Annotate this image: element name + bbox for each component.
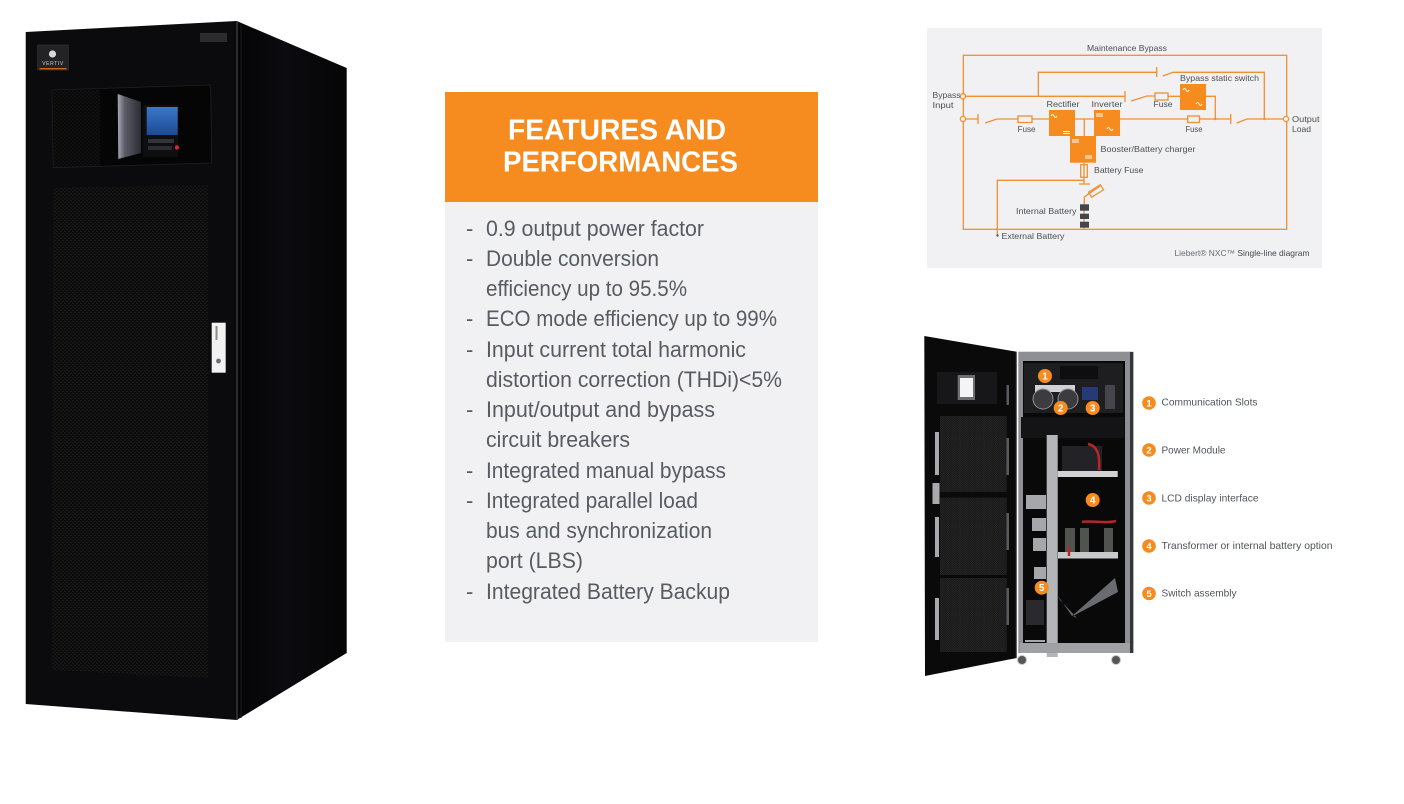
feature list: ECO mode efficiency up to 99%: [486, 306, 777, 331]
legend item 4: 4: [1146, 542, 1152, 552]
cabinet front door: [26, 21, 237, 720]
legend item 1: 1: [1146, 398, 1152, 410]
heading band: FEATURES AND: [508, 115, 726, 147]
diagram labels: Inverter: [1092, 99, 1123, 109]
legend item 1: Communication Slots: [1162, 396, 1258, 408]
cabinet frame: [1018, 352, 1133, 653]
feature list: port (LBS): [486, 548, 583, 573]
feature list: -: [466, 458, 473, 483]
feature list: circuit breakers: [486, 427, 630, 452]
ventilation mesh panel: [52, 185, 208, 678]
open door: [924, 336, 1017, 676]
feature list: 0.9 output power factor: [486, 216, 704, 241]
numbered markers on photo: 3: [1090, 404, 1096, 414]
numbered markers on photo: 2: [1058, 404, 1064, 414]
feature list: Input/output and bypass: [486, 397, 715, 422]
diagram background: [927, 28, 1322, 268]
feature list: distortion correction (THDi)<5%: [486, 367, 782, 392]
control panel: [143, 105, 179, 157]
legend item 2: 2: [1146, 446, 1152, 456]
breaker column: [1025, 495, 1046, 642]
diagram labels: Maintenance Bypass: [1087, 43, 1167, 53]
product photo: open UPS cabinet: [924, 336, 1133, 676]
model nameplate: [200, 33, 227, 42]
legend item 2: [1142, 443, 1226, 457]
legend item 3: 3: [1146, 494, 1152, 504]
legend item 3: LCD display interface: [1162, 492, 1259, 504]
Vertiv logo badge: [38, 45, 68, 70]
cabinet side face: [237, 21, 347, 720]
circuit wiring: [960, 55, 1289, 236]
converter blocks: [1049, 84, 1206, 163]
feature list: efficiency up to 95.5%: [486, 276, 687, 301]
legend item 4: Transformer or internal battery option: [1162, 540, 1333, 552]
open display cover: [118, 94, 141, 159]
diagram labels: Fuse: [1154, 99, 1173, 109]
feature list: bus and synchronization: [486, 518, 712, 543]
feature list: -: [466, 246, 473, 271]
legend item 2: Power Module: [1162, 444, 1226, 456]
product photo: closed UPS cabinet: [26, 21, 347, 720]
panel: features and performances: [445, 92, 818, 642]
door handle: [212, 323, 226, 373]
door filter panels: [940, 416, 1007, 652]
legend item 5: Switch assembly: [1162, 588, 1237, 600]
diagram labels: Output: [1292, 114, 1320, 124]
feature list: Integrated Battery Backup: [486, 579, 730, 604]
feature list: -: [466, 579, 473, 604]
feature list: [466, 216, 782, 604]
lower chassis brace: [1058, 578, 1118, 618]
diagram labels: Fuse: [1018, 124, 1036, 134]
red cables: [1069, 444, 1116, 556]
junction dots: [1214, 118, 1266, 120]
numbered markers on photo: [1035, 369, 1100, 595]
center steel door plate: [1047, 435, 1058, 657]
feature list: Input current total harmonic: [486, 337, 746, 362]
diagram labels: Bypass: [932, 90, 960, 100]
heading band: PERFORMANCES: [503, 146, 738, 178]
numbered markers on photo: 1: [1042, 372, 1048, 382]
internal battery cells: [1080, 204, 1089, 228]
Vertiv logo badge: VERTIV: [42, 61, 64, 67]
display window: [52, 85, 212, 168]
diagram labels: Booster/Battery charger: [1100, 144, 1196, 154]
diagram labels: Rectifier: [1046, 99, 1080, 109]
numbered markers on photo: 5: [1039, 583, 1045, 594]
door hardware: [932, 385, 1009, 640]
cabinet base: [1020, 643, 1130, 653]
feature list: Double conversion: [486, 246, 659, 271]
feature list: Integrated parallel load: [486, 488, 698, 513]
feature list: -: [466, 306, 473, 331]
caster wheels: [1018, 656, 1120, 664]
diagram labels: Input: [932, 100, 954, 110]
feature list: -: [466, 488, 473, 513]
numbered markers on photo: 4: [1090, 496, 1096, 506]
diagram labels: Fuse: [1186, 124, 1203, 134]
black cover band: [1021, 417, 1124, 438]
diagram labels: Liebert® NXC™ Single-line diagram: [1174, 248, 1310, 258]
diagram labels: [932, 43, 1320, 258]
external battery terminal: [996, 234, 999, 237]
panel: single-line diagram: [927, 28, 1322, 268]
door inner display cutout: [937, 372, 997, 404]
diagram labels: Bypass static switch: [1180, 73, 1259, 83]
feature list: Integrated manual bypass: [486, 458, 726, 483]
diagram labels: Battery Fuse: [1094, 165, 1144, 175]
block symbols: [1051, 88, 1202, 158]
window mesh: [53, 90, 100, 167]
feature list: -: [466, 397, 473, 422]
legend item 5: 5: [1146, 589, 1152, 600]
diagram labels: External Battery: [1002, 231, 1065, 241]
diagram labels: Load: [1292, 124, 1311, 134]
diagram labels: Internal Battery: [1016, 206, 1077, 216]
feature list: -: [466, 216, 473, 241]
power module: [1024, 363, 1123, 413]
feature list: -: [466, 337, 473, 362]
legend item 5: [1142, 587, 1237, 600]
internal shelves: [1058, 446, 1118, 558]
legend: cabinet components: [1142, 396, 1333, 600]
heading band: [445, 92, 818, 202]
panel background: [445, 202, 818, 642]
